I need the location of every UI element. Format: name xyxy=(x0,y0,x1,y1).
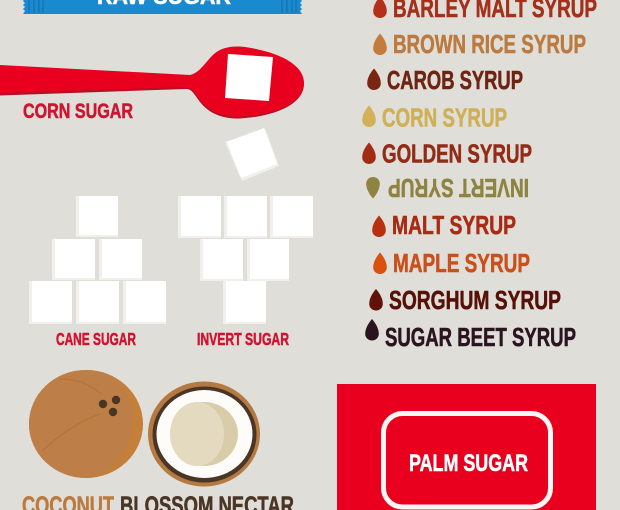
sorghum syrup item: SORGHUM SYRUP xyxy=(389,287,561,315)
golden syrup item: GOLDEN SYRUP xyxy=(382,140,532,168)
invert sugar cubes xyxy=(178,196,313,324)
palm sugar packet: PALM SUGAR xyxy=(409,450,528,477)
corn syrup item xyxy=(362,104,507,132)
cane sugar label: CANE SUGAR xyxy=(56,329,136,349)
carob syrup item xyxy=(367,67,523,95)
coconut eyes xyxy=(99,396,120,416)
maple syrup item: MAPLE SYRUP xyxy=(393,250,530,278)
corn sugar label: CORN SUGAR xyxy=(23,99,133,123)
malt syrup item: MALT SYRUP xyxy=(392,212,516,240)
malt syrup item xyxy=(372,212,516,240)
halved coconut xyxy=(148,382,260,486)
maple syrup item xyxy=(373,250,530,278)
sugar beet syrup item xyxy=(365,319,576,352)
invert syrup item (upside down): INVERT SYRUP xyxy=(388,173,529,201)
golden syrup item xyxy=(362,140,532,168)
corn syrup item: CORN SYRUP xyxy=(382,104,507,132)
palm sugar packet xyxy=(337,384,596,510)
sugar cube in spoon xyxy=(225,54,273,101)
coconut blossom nectar label xyxy=(22,492,294,510)
spoon with sugar cube xyxy=(0,46,304,119)
sorghum syrup item xyxy=(369,287,561,315)
raw sugar packet xyxy=(23,0,302,14)
whole coconut xyxy=(29,370,143,478)
carob syrup item: CAROB SYRUP xyxy=(387,67,523,95)
invert sugar label: INVERT SUGAR xyxy=(197,329,289,349)
cane sugar cubes xyxy=(29,196,166,324)
falling sugar cube xyxy=(225,128,279,181)
